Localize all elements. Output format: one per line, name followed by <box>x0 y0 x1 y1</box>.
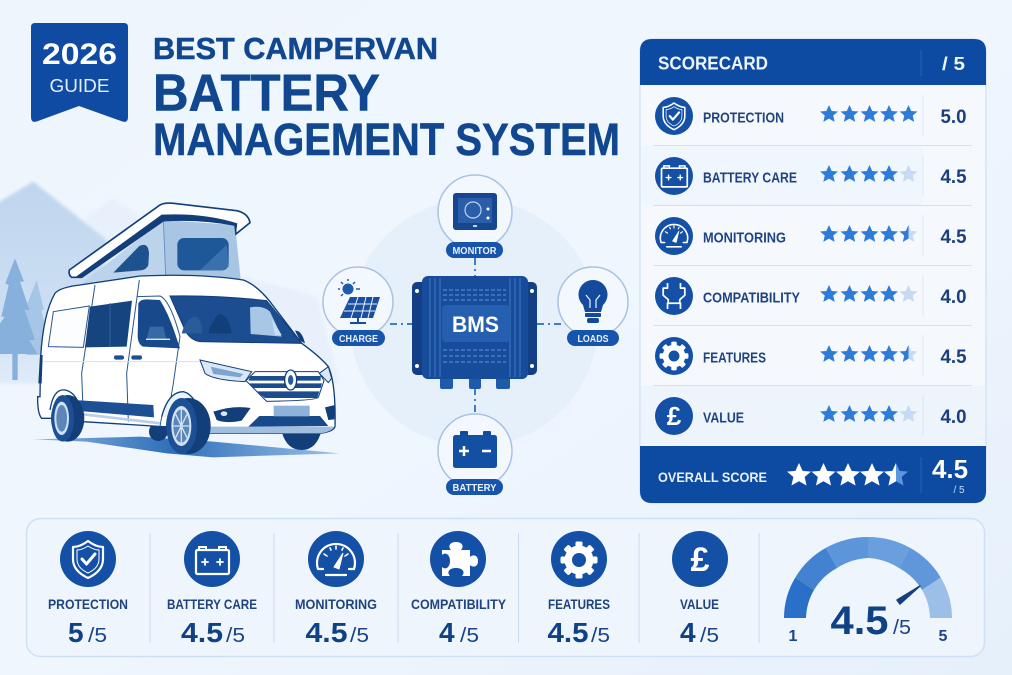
illustration: campervan <box>33 203 340 457</box>
front wheel <box>162 392 211 454</box>
node: monitor <box>438 175 512 258</box>
badge: 2026 guide <box>31 23 128 122</box>
gauge needle <box>897 586 920 604</box>
metric: value: 4 <box>680 617 696 648</box>
metric: battery care: 4.5 <box>181 617 223 648</box>
metric: compatibility: 4 <box>439 617 455 648</box>
title: MANAGEMENT SYSTEM <box>153 114 620 165</box>
metric: value: £ <box>691 541 710 579</box>
scorecard header: SCORECARD <box>658 54 768 74</box>
metric: value: /5 <box>700 625 719 647</box>
node: loads <box>558 267 628 346</box>
node: battery: BATTERY <box>452 483 497 494</box>
metric: compatibility: /5 <box>460 625 479 647</box>
badge: 2026 guide: GUIDE <box>50 75 110 96</box>
far wheel <box>149 422 168 441</box>
node: loads: LOADS <box>578 334 609 345</box>
row: monitoring: 4.5 <box>940 227 967 248</box>
headlight <box>200 360 252 382</box>
side panels and doors <box>40 280 207 427</box>
metric: compatibility <box>411 531 507 648</box>
row: value: 4.0 <box>940 407 966 428</box>
title <box>153 31 620 165</box>
metric: features: FEATURES <box>548 596 610 612</box>
metric: protection: PROTECTION <box>48 596 128 612</box>
row: battery care: BATTERY CARE <box>703 170 797 186</box>
metric: protection <box>48 531 128 648</box>
scorecard header: / 5 <box>942 54 965 74</box>
metric: features: 4.5 <box>548 617 588 648</box>
title: BATTERY <box>153 64 380 122</box>
metric: monitoring: 4.5 <box>306 617 348 648</box>
bumper <box>213 407 251 422</box>
overall score bar: / 5 <box>953 485 965 496</box>
pop-top roof <box>69 203 250 285</box>
door handles <box>114 355 142 360</box>
metric: protection: 5 <box>68 617 84 648</box>
metric: features <box>548 531 610 648</box>
metric: battery care: BATTERY CARE <box>167 596 257 612</box>
node: monitor: MONITOR <box>452 246 497 257</box>
gauge: 1 <box>789 628 798 645</box>
overall score bar: OVERALL SCORE <box>658 469 767 485</box>
side windows <box>85 301 132 347</box>
gauge: 5 <box>939 628 948 645</box>
gauge: /5 <box>893 617 911 639</box>
metric: battery care <box>167 531 257 648</box>
hub background circle <box>350 199 598 447</box>
scorecard header <box>640 39 986 85</box>
row: battery care: 4.5 <box>940 167 967 188</box>
overall score bar: 4.5 <box>932 454 968 484</box>
row: value: VALUE <box>703 410 744 426</box>
rear wheel <box>50 390 84 442</box>
row: compatibility: COMPATIBILITY <box>703 290 800 306</box>
row: protection <box>655 97 966 135</box>
row: battery care <box>655 157 967 195</box>
row: features: 4.5 <box>940 347 967 368</box>
node: charge <box>323 267 393 346</box>
metric: protection: /5 <box>88 625 107 647</box>
row: monitoring <box>655 217 967 255</box>
windscreen <box>170 296 302 343</box>
metric: features: /5 <box>591 625 610 647</box>
overall score bar <box>640 446 986 503</box>
row: value: £ <box>667 401 682 431</box>
gauge <box>784 537 952 645</box>
row: features <box>655 337 967 375</box>
connectors: dashed lines <box>390 258 568 416</box>
grille <box>246 370 324 401</box>
panel: summary strip <box>26 518 984 656</box>
van ground shadow <box>33 437 340 457</box>
BMS label: BMS <box>452 312 499 337</box>
row: compatibility: 4.0 <box>940 287 966 308</box>
gauge: 4.5 <box>830 599 888 643</box>
metric: value <box>672 531 728 648</box>
node: charge: CHARGE <box>339 334 378 345</box>
badge: 2026 guide: 2026 <box>42 38 117 71</box>
row: protection: PROTECTION <box>703 110 784 126</box>
row: compatibility <box>655 277 966 315</box>
scene: mountains and trees <box>0 182 340 383</box>
row: protection: 5.0 <box>940 107 966 128</box>
metric: compatibility: COMPATIBILITY <box>411 596 507 612</box>
lower sill <box>74 400 154 417</box>
row: monitoring: MONITORING <box>703 230 786 246</box>
metric: battery care: /5 <box>226 625 245 647</box>
title: BEST CAMPERVAN <box>153 31 438 66</box>
metric: monitoring: MONITORING <box>295 596 377 612</box>
row: value <box>655 397 966 435</box>
row: features: FEATURES <box>703 350 766 366</box>
van body <box>38 275 335 433</box>
metric: monitoring <box>295 531 377 648</box>
panel: scorecard <box>640 39 986 503</box>
node: battery <box>438 414 512 495</box>
metric: value: VALUE <box>680 596 719 612</box>
metric: monitoring: /5 <box>350 625 369 647</box>
BMS unit <box>412 276 537 389</box>
